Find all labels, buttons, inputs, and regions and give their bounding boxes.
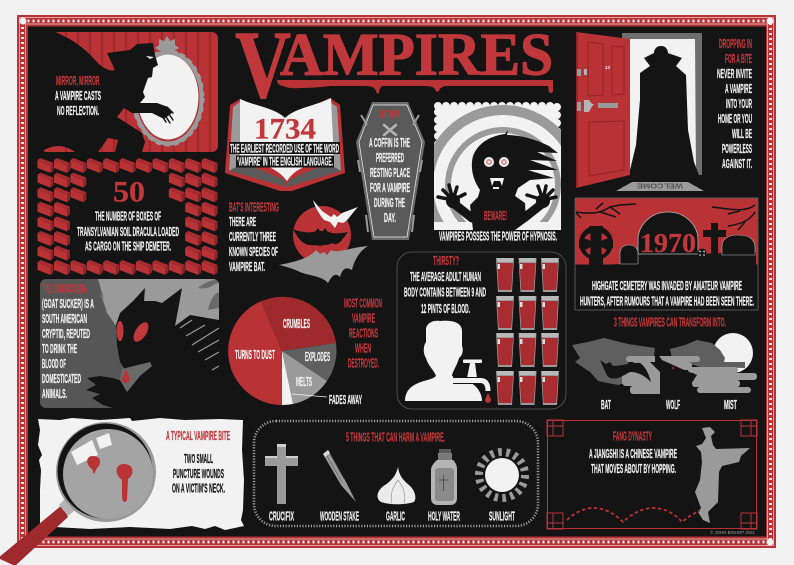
text: TO DRINK THE	[42, 341, 77, 356]
glasses of blood	[496, 258, 559, 405]
icon: door frame	[622, 33, 702, 175]
bricks	[38, 158, 218, 275]
number 1970: 1970	[640, 228, 696, 258]
panel: pie chart: FADES AWAY	[329, 392, 362, 407]
pie labels: MELTS	[296, 374, 312, 389]
panel: transform: MIST	[724, 397, 737, 412]
panel: 5 things	[254, 421, 538, 526]
labels: WOODEN STAKE	[320, 509, 359, 524]
icon: person with tap	[405, 321, 491, 403]
title: AMPIRES	[280, 22, 553, 88]
icon: hypnotic vampire	[434, 102, 561, 230]
panel: thirsty: 12 PINTS OF BLOOD.	[421, 301, 470, 316]
icon: holy water	[431, 449, 457, 505]
panel: cemetery	[575, 198, 758, 310]
pie heading	[344, 296, 382, 371]
panel: hypnosis	[434, 102, 561, 241]
panel: boxes of soil: TRANSYLVANIAN SOIL DRACULA LOADED	[77, 224, 179, 239]
text: bat's interesting	[229, 200, 279, 274]
text: ANIMALS.	[42, 386, 67, 401]
panel: coffin: DURING THE	[374, 195, 405, 210]
panel: pie chart	[228, 296, 382, 407]
pie labels	[235, 316, 362, 407]
caption	[77, 209, 179, 254]
panel: boxes of soil: THE NUMBER OF BOXES OF	[95, 209, 161, 224]
icon: bats and moon	[279, 200, 368, 283]
pie labels: TURNS TO DUST	[235, 347, 275, 362]
caption	[580, 278, 754, 309]
poster: 'VAMPIRE' IN THE ENGLISH LANGUAGE.	[237, 154, 333, 168]
labels: GARLIC	[386, 509, 405, 524]
icon: jiangshi figure	[695, 427, 750, 523]
labels	[601, 397, 737, 412]
panel: book 1734	[225, 98, 345, 191]
icon: crossbones	[384, 125, 396, 135]
icon: red door	[576, 32, 630, 188]
text	[404, 253, 486, 316]
icon: welcome mat	[616, 182, 704, 191]
caption	[229, 142, 340, 168]
panel: mirror	[41, 32, 218, 152]
text: mirror, mirror	[55, 73, 101, 118]
panel: mirror: NO REFLECTION.	[57, 103, 99, 118]
labels: HOLY WATER	[428, 509, 460, 524]
hopping path	[567, 508, 700, 522]
icon: chupacabra silhouette	[86, 288, 219, 408]
panel: coffin: FOR A VAMPIRE	[370, 180, 410, 195]
panel: vampire bite: ON A VICTIM'S NECK.	[172, 480, 225, 496]
panel: thirsty: BODY CONTAINS BETWEEN 9 AND	[404, 285, 486, 300]
poster: A VAMPIRE	[725, 81, 752, 96]
pie heading: VAMPIRE	[352, 311, 375, 326]
number 50: 50	[113, 176, 145, 208]
panel: bats: KNOWN SPECIES OF	[229, 244, 278, 259]
icon: vampire silhouette	[41, 32, 173, 152]
poster: VAMPIRES POSSESS THE POWER OF HYPNOSIS.	[439, 229, 557, 244]
panel: chupacabra: (GOAT SUCKER) IS A	[42, 296, 94, 311]
labels: BAT	[601, 397, 611, 412]
panel: bats: BAT'S INTERESTING	[229, 200, 279, 215]
panel: chupacabra: THE CHUPACABRA	[42, 281, 87, 296]
panel: coffin: PREFERRED	[376, 150, 404, 165]
panel: 5 things: 5 THINGS THAT CAN HARM A VAMPIRE.	[346, 430, 445, 445]
icon: crucifix	[265, 444, 298, 504]
icon: cloaked figure	[630, 46, 700, 178]
title: V	[235, 11, 291, 118]
panel: bats	[229, 200, 368, 283]
poster: MOST COMMON	[344, 296, 382, 311]
panel: coffin: BAT NAP	[380, 109, 399, 121]
panel: bats: CURRENTLY THREE	[229, 229, 276, 244]
beware text: BEWARE!	[484, 208, 507, 223]
pie heading: WHEN	[355, 341, 371, 356]
door text	[717, 36, 752, 171]
panel: thirsty	[397, 252, 566, 409]
panel: vampire bite: PUNCTURE WOUNDS	[173, 466, 224, 481]
text: TWO SMALL	[184, 451, 213, 466]
text: bat's interesting: THERE ARE	[229, 214, 256, 229]
panel: 5 things: SUNLIGHT	[489, 509, 515, 524]
panel: mirror: MIRROR, MIRROR	[56, 73, 100, 88]
ornate frame	[547, 420, 757, 529]
icon: wooden stake	[323, 450, 356, 502]
coffin text	[369, 135, 410, 225]
icon: moon	[713, 333, 753, 373]
icon: garlic	[378, 467, 415, 504]
number 1734: 1734	[254, 113, 316, 146]
copyright: © JOHN BISHOP 2021	[710, 529, 755, 535]
panel: vampire bite	[0, 418, 244, 565]
icon: welcome mat: WELCOME	[637, 182, 683, 190]
labels	[269, 509, 515, 524]
poster: A TYPICAL VAMPIRE BITE	[166, 428, 230, 443]
text: DOMESTICATED	[42, 371, 81, 386]
poster: WILL BE	[732, 126, 752, 141]
panel: fang dynasty	[547, 420, 757, 535]
panel: coffin: RESTING PLACE	[370, 165, 410, 180]
panel: chupacabra: SOUTH AMERICAN	[42, 311, 87, 326]
text	[166, 428, 230, 496]
poster: THE EARLIEST RECORDED USE OF THE WORD	[230, 142, 339, 156]
panel: thirsty: THE AVERAGE ADULT HUMAN	[410, 269, 481, 284]
poster: REACTIONS	[349, 326, 378, 341]
labels: CRUCIFIX	[269, 509, 294, 524]
poster: DESTROYED.	[348, 356, 379, 371]
panel: door	[576, 32, 752, 191]
panel: coffin: A COFFIN IS THE	[369, 135, 410, 150]
title	[235, 11, 553, 118]
labels: WOLF	[666, 397, 680, 412]
text	[42, 281, 94, 401]
icon: magnifying glass	[0, 422, 156, 565]
panel: mirror: A VAMPIRE CASTS	[55, 88, 101, 103]
icon: mirror	[133, 36, 203, 145]
panel: coffin	[356, 102, 425, 240]
beware text	[439, 208, 557, 244]
text: bat's interesting: VAMPIRE BAT.	[229, 259, 265, 274]
text: THIRSTY?	[433, 253, 459, 268]
icon: open book	[225, 98, 345, 191]
coffin text: DAY.	[384, 210, 396, 225]
icon: gravestones and trees	[576, 203, 756, 296]
pie chart	[228, 297, 337, 405]
text: FANG DYNASTY	[613, 429, 652, 444]
panel: chupacabra	[40, 279, 219, 408]
pie labels: CRUMBLES	[283, 316, 310, 331]
pie labels: EXPLODES	[305, 349, 330, 364]
text	[589, 429, 677, 476]
panel: chupacabra: CRYPTID, REPUTED	[42, 326, 90, 341]
panel: transform	[572, 315, 757, 412]
panel: boxes of soil: AS CARGO ON THE SHIP DEMETER.	[85, 239, 171, 254]
icon: red door: 13	[605, 65, 611, 70]
text: BLOOD OF	[42, 356, 66, 371]
icon: sunlight	[479, 452, 525, 498]
icon: mist, bat and wolf	[572, 338, 757, 394]
panel: boxes of soil	[38, 158, 218, 275]
